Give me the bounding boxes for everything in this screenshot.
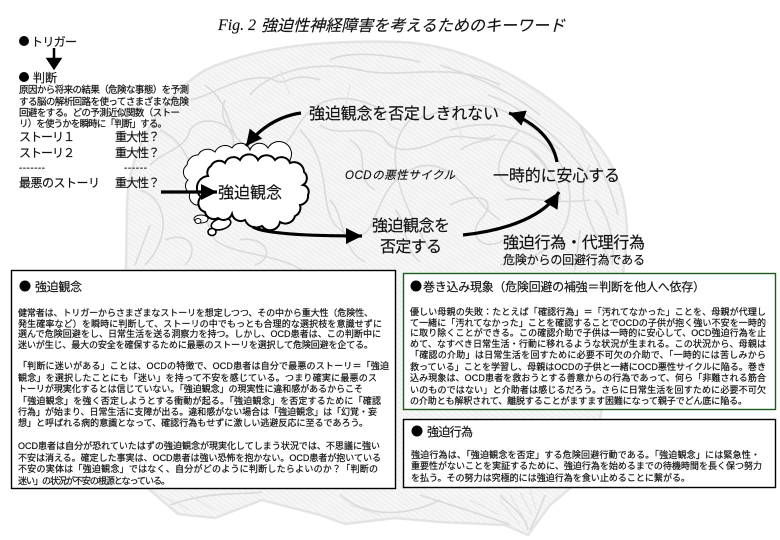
panel: compulsion xyxy=(404,420,776,488)
panel body text: 「判断に迷いがある」ことは、OCDの特徴で、OCD患者は自分で最悪のストーリ＝「強迫 xyxy=(18,360,389,371)
panel: entanglement xyxy=(404,274,776,410)
panel body text: 健常者は、トリガーからさまざまなストーリを想定しつつ、その中から重大性（危険性、 xyxy=(18,307,373,318)
judgement block: 原因から将来の結果（危険な事態）を予測 xyxy=(19,84,189,96)
panel body text: 込み現象は、OCD患者を救おうとする善意からの行為であって、何ら「非難される筋合 xyxy=(410,372,766,383)
panel body text: めて、なすべき日常生活・行動に移れるような状況が生まれる。この状況から、母親は xyxy=(410,338,766,349)
arrow: relief to cannot deny xyxy=(509,113,557,162)
label: deny obsession: 否定する xyxy=(380,238,442,256)
judgement block: 判断 xyxy=(33,71,57,85)
panel body text: 強迫行為は、「強迫観念を否定」する危険回避行動である。「強迫観念」には緊急性・ xyxy=(411,449,760,460)
panel body text: 想」と呼ばれる病的意識となって、確認行為もせずに激しい逃避反応に至るであろう。 xyxy=(18,417,368,428)
panel body text xyxy=(411,449,762,483)
panel body text: の介助とも解釈されて、離脱することがますます困難になって親子でどん底に陥る。 xyxy=(410,395,747,406)
panel body text: 重要性がないことを実証するために、強迫行為を始めるまでの待機時間を長く保つ努力 xyxy=(411,460,762,471)
panel body text: 観念」を選択したことにも「迷い」を持って不安を感じている。つまり確実に最悪のス xyxy=(18,372,377,383)
panel heading: 巻き込み現象（危険回避の補強＝判断を他人へ依存） xyxy=(423,280,705,294)
panel body text: を払う。その努力は究極的には強迫行為を食い止めることに繋がる。 xyxy=(411,472,690,483)
label: deny obsession xyxy=(372,217,450,256)
panel body text: OCD患者は自分が恐れていたはずの強迫観念が現実化してしまう状況では、不思議に強い xyxy=(18,440,380,451)
story list: 重大性？ xyxy=(115,130,160,144)
panel body text: 不安の実体は「強迫観念」ではなく、自分がどのように判断したらよいのか？「判断の xyxy=(18,463,378,474)
arrow: back to obsession xyxy=(246,113,301,146)
arrow: obsession to denial xyxy=(253,227,362,236)
panel body text: 選んで危険回避をし、日常生活を送る洞察力を持つ。しかし、OCD患者は、この判断中に xyxy=(18,328,381,339)
arrow: denial to relief xyxy=(463,192,559,235)
label: temporary relief: 一時的に安心する xyxy=(493,167,620,185)
panel body text: 不安は消える。確定した事実は、OCD患者は強い恐怖を抱かない。OCD患者が抱いている xyxy=(18,452,381,463)
panel heading: 強迫観念 xyxy=(35,280,82,294)
title: 強迫性神経障害を考えるためのキーワード xyxy=(261,17,566,35)
obsession label: 強迫観念 xyxy=(218,184,282,202)
panel body text: いのものではない」と介助者は感じるだろう。さらに日常生活を回すために必要不可欠 xyxy=(410,384,766,395)
judgement block: リ）を使うかを瞬時に「判断」する。 xyxy=(19,118,167,130)
story list: ストーリ１ xyxy=(19,130,75,144)
panel heading: 強迫行為 xyxy=(427,425,473,439)
cycle label: OCDの悪性サイクル xyxy=(345,169,456,182)
story list: 重大性？ xyxy=(115,146,160,160)
panel body text: に取り除くことができる。この確認介助で子供は一時的に安心して、OCD強迫行為を止 xyxy=(410,327,766,338)
arrow: judgement to obsession xyxy=(161,190,217,194)
label: deny obsession: 強迫観念を xyxy=(372,217,450,235)
brain illustration background xyxy=(125,42,627,535)
title: Fig. 2 xyxy=(217,17,256,34)
thought cloud xyxy=(183,141,309,236)
story list: ストーリ２ xyxy=(19,146,75,160)
label: compulsion: 強迫行為・代理行為 xyxy=(503,234,645,252)
panel body text: て一緒に「汚れてなかった」ことを確認することでOCDの子供が抱く強い不安を一時的 xyxy=(410,317,766,328)
story list: ------- xyxy=(19,163,45,174)
panel body text: 「確認の介助」は日常生活を回すために必要不可欠の介助で、「一時的には苦しみから xyxy=(410,349,766,360)
panel body text: 行為」が始まり、日常生活に支障が出る。違和感がない場合は「強迫観念」は「幻覚・妄 xyxy=(18,406,377,417)
label: compulsion: 危険からの回避行為である xyxy=(503,253,645,267)
label: compulsion xyxy=(503,234,645,267)
panel body text xyxy=(18,307,389,486)
panel body text xyxy=(410,306,766,406)
story list: 重大性？ xyxy=(115,176,160,190)
trigger label: トリガー xyxy=(31,35,77,49)
arrow: trigger to judgement xyxy=(48,48,60,68)
panel body text: 「強迫観念」を強く否定しようとする衝動が起る。「強迫観念」を否定するために「確認 xyxy=(18,395,381,406)
judgement block xyxy=(19,71,189,130)
panel body text: トーリが現実化するとは信じていない。「強迫観念」の現実性に違和感があるからこそ xyxy=(18,383,363,394)
label: cannot deny: 強迫観念を否定しきれない xyxy=(309,105,499,123)
story list xyxy=(19,130,160,190)
panel body text: 救っている」ことを学習し、母親はOCDの子供と一緒にOCD悪性サイクルに陥る。巻き xyxy=(410,361,766,372)
judgement block: 回避をする。どの予測近似関数（ストー xyxy=(19,107,180,119)
panel: obsession xyxy=(12,270,396,488)
panel body text: 優しい母親の失敗：たとえば「確認行為」＝「汚れてなかった」ことを、母親が代理し xyxy=(410,306,766,317)
panel body text: 迷い」の状況が不安の根源となっている。 xyxy=(18,475,170,486)
judgement block: する脳の解析回路を使ってさまざまな危険 xyxy=(19,96,189,108)
panel body text: 発生確率など）を瞬時に判断して、ストーリの中でもっとも合理的な選択枝を意識せずに xyxy=(18,318,382,329)
story list: 最悪のストーリ xyxy=(19,176,100,190)
story list: ------ xyxy=(124,163,147,174)
panel body text: 迷いが生じ、最大の安全を確保するために最悪のストーリを選択して危険回避を企てる。 xyxy=(18,339,373,350)
